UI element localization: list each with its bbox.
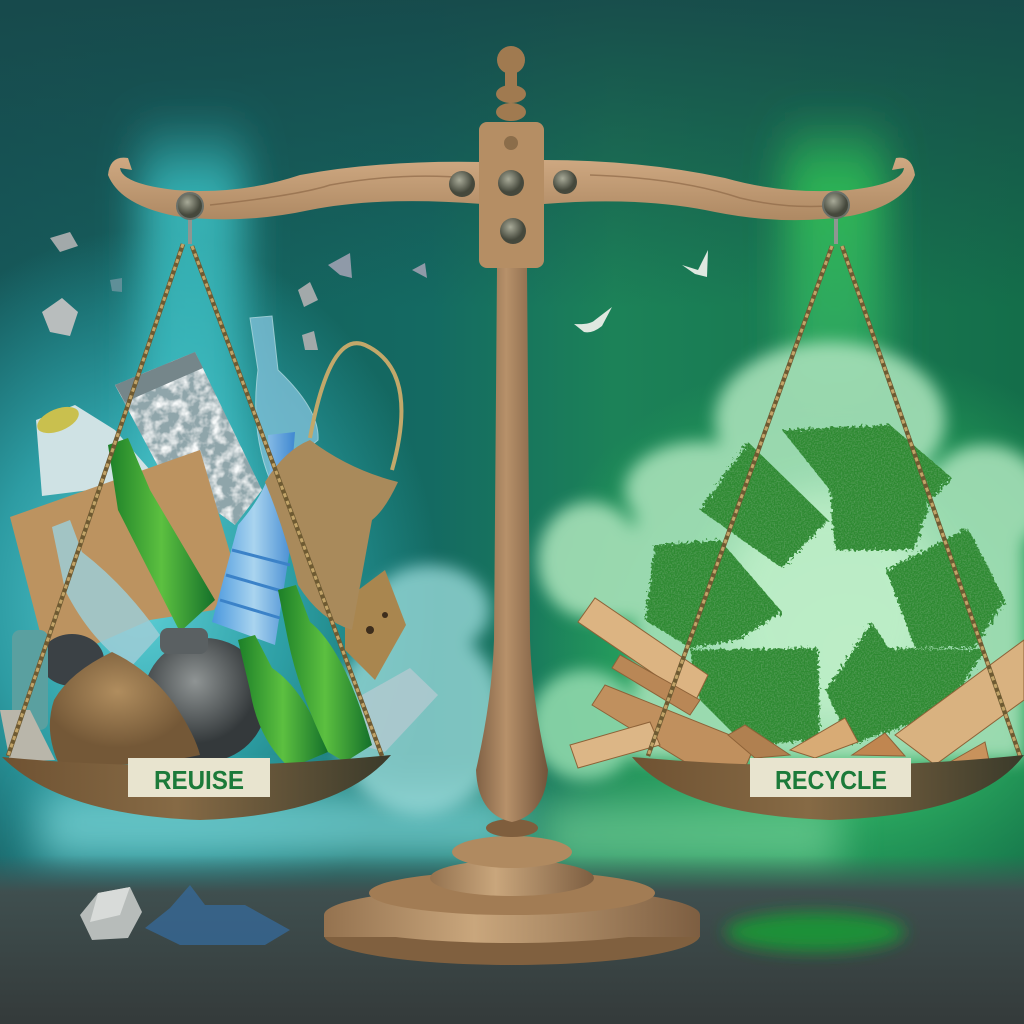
right hanging ropes [648, 192, 1020, 756]
label: recycle: RECYCLE [775, 765, 887, 795]
cardboard [10, 450, 235, 660]
green dust on ground [725, 912, 905, 952]
panel: recycle pan [632, 755, 1024, 820]
birds [574, 250, 708, 332]
tall clear bottle [250, 316, 318, 480]
rubble on ground [80, 885, 290, 945]
white container [33, 402, 150, 496]
label: reuse [128, 758, 270, 797]
finial [496, 46, 526, 121]
large green bottle [108, 438, 215, 632]
burlap bag [265, 343, 401, 630]
pole [476, 268, 548, 822]
wood pile [570, 598, 1024, 768]
reuse items [0, 316, 438, 768]
metal pot [143, 628, 267, 762]
green bottle three [278, 585, 372, 762]
label: recycle [750, 758, 911, 797]
clouds [335, 342, 1024, 815]
burlap sack [50, 652, 200, 765]
blue water bottle [212, 432, 296, 645]
white rag [0, 710, 55, 762]
left hanging ropes [8, 193, 382, 756]
crushed plastic [360, 668, 438, 752]
small can and glass [40, 634, 104, 686]
ground [0, 855, 1024, 1024]
perforated wood block [345, 570, 406, 680]
scale stand [324, 268, 700, 965]
small clear bottle [52, 520, 160, 668]
floating rubble [42, 232, 427, 350]
panel: reuse pan [2, 755, 391, 820]
green bottle two [238, 635, 328, 768]
label: reuse: REUISE [154, 765, 244, 795]
central block [479, 122, 544, 268]
base [324, 819, 700, 965]
glass jar [115, 352, 262, 525]
recycle symbol [645, 425, 1005, 745]
scale beam [108, 158, 915, 220]
